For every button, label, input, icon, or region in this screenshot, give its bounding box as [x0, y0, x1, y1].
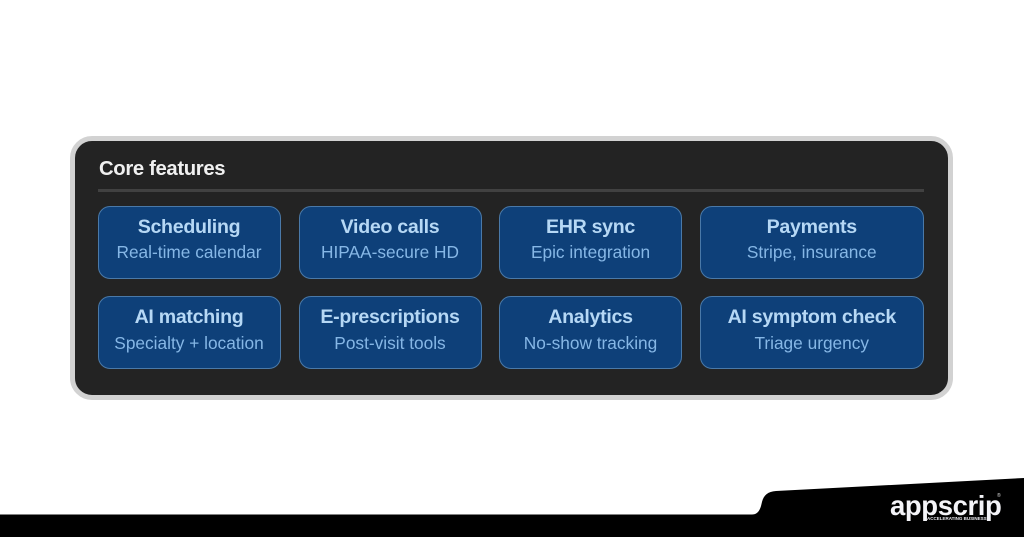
- card: e-prescriptions: [298, 296, 482, 369]
- card: scheduling: [98, 206, 280, 278]
- card: AI matching: Specialty + location: [114, 332, 264, 352]
- card: EHR sync: EHR sync: [546, 216, 635, 238]
- panel: core features: [70, 136, 953, 400]
- logo: appscrip: ACCELERATING BUSINESS: [927, 516, 987, 521]
- card: payments: Payments: [767, 216, 857, 238]
- card: AI symptom check: Triage urgency: [754, 332, 869, 352]
- logo: appscrip: appscrip: [890, 490, 1001, 521]
- card: scheduling: Real-time calendar: [116, 242, 262, 262]
- card: analytics: Analytics: [548, 306, 633, 328]
- card: analytics: [499, 296, 682, 369]
- card: scheduling: Scheduling: [138, 216, 240, 238]
- card: payments: [700, 206, 924, 278]
- card: AI matching: AI matching: [135, 306, 243, 328]
- card: video calls: Video calls: [341, 216, 439, 238]
- card: payments: Stripe, insurance: [747, 242, 877, 262]
- card: e-prescriptions: E-prescriptions: [320, 306, 460, 328]
- card: AI symptom check: AI symptom check: [728, 306, 896, 328]
- heading: core features: Core features: [99, 158, 225, 180]
- card: EHR sync: [499, 206, 682, 278]
- footer band: [0, 478, 1024, 537]
- card: video calls: HIPAA-secure HD: [321, 242, 459, 262]
- logo: appscrip: ®: [997, 493, 1001, 499]
- card: analytics: No-show tracking: [524, 332, 657, 352]
- card: EHR sync: Epic integration: [531, 242, 650, 262]
- card: video calls: [298, 206, 482, 278]
- card: AI symptom check: [700, 296, 924, 369]
- card: e-prescriptions: Post-visit tools: [334, 332, 446, 352]
- card: AI matching: [98, 296, 280, 369]
